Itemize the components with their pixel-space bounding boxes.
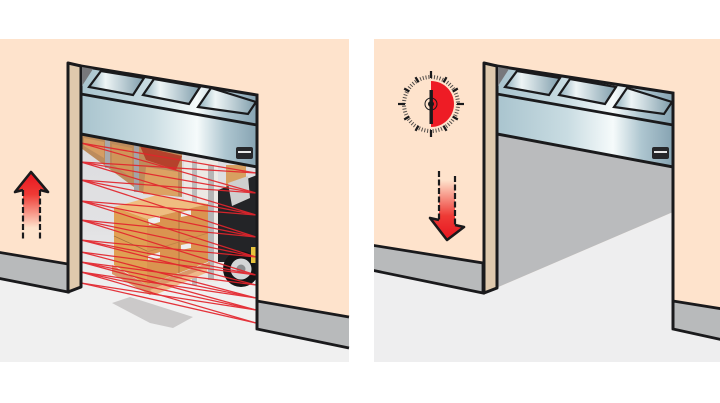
door frame post [68,63,81,292]
right baseboard [257,301,349,348]
icon: timer clock [398,71,464,137]
panel: door opening with light curtain [0,39,349,362]
pallet load [112,195,210,295]
pallet shadow [112,297,193,328]
shadow inside door [496,134,673,288]
right jamb [256,95,258,329]
left baseboard [0,252,68,292]
right baseboard [673,301,720,340]
floor [374,212,720,362]
floor [0,278,349,362]
icon: up arrow [15,172,48,240]
shelves with boxes [81,134,182,197]
icon: down arrow [430,171,464,240]
forklift [184,160,259,287]
door frame post [484,63,497,293]
left baseboard [371,245,483,293]
roller door [81,66,257,167]
panel: door closing [371,39,720,362]
wall [0,39,349,362]
right jamb [672,168,674,329]
roller door [497,66,673,167]
red light curtain beams [81,143,256,323]
wall [374,39,720,308]
right baseboard edges [257,301,349,348]
scene behind door [82,136,256,328]
